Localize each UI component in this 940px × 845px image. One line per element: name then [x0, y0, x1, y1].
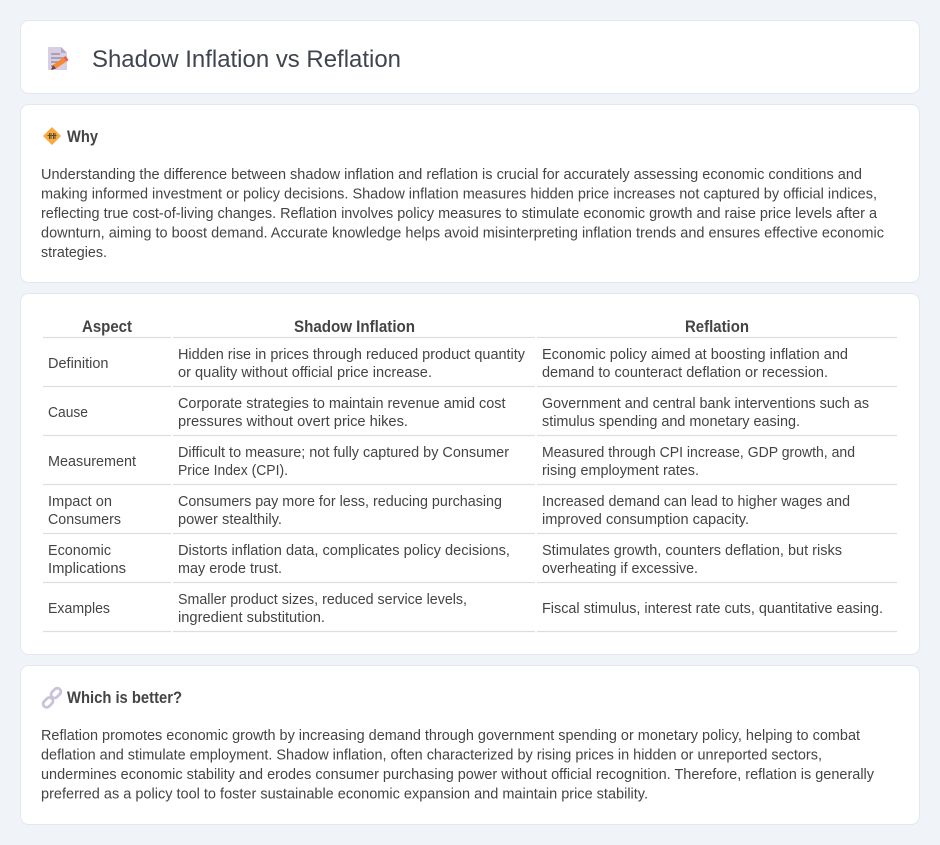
icon: memo with pencil	[48, 47, 68, 70]
text block: which is better paragraph: deflation and stimulate employment. Shadow inflation, often characterized by rising prices in hidden or unreported sectors,	[41, 746, 822, 764]
table row: examples: ingredient substitution.	[178, 610, 325, 626]
table row: economic implications: overheating if excessive.	[542, 561, 698, 577]
panel: header	[20, 20, 920, 94]
table row: economic implications: Distorts inflation data, complicates policy decisions,	[178, 543, 510, 559]
icon: warning diamond	[44, 128, 60, 144]
panel: comparison table	[20, 294, 920, 654]
table row: examples	[48, 592, 883, 626]
table row: impact on consumers: improved consumption capacity.	[542, 512, 749, 528]
table row: impact on consumers: Impact on	[48, 494, 112, 510]
text block: which is better paragraph: preferred as a policy tool to foster sustainable economic expansion and maintain price stability.	[41, 786, 648, 802]
table row: impact on consumers: Consumers pay more for less, reducing purchasing	[178, 494, 502, 510]
text block: which is better paragraph: undermines economic stability and erodes consumer purchasing power without official recognition. Therefore, reflation is generally	[41, 766, 874, 783]
table row: definition: Economic policy aimed at boosting inflation and	[542, 347, 848, 363]
table row: measurement: Measured through CPI increase, GDP growth, and	[542, 445, 855, 461]
table row: definition: demand to counteract deflation or recession.	[542, 365, 828, 381]
table row: measurement: rising employment rates.	[542, 463, 699, 479]
text block: why paragraph: strategies.	[41, 244, 107, 261]
table row: measurement: Price Index (CPI).	[178, 463, 288, 479]
table row: impact on consumers	[48, 494, 850, 528]
table row: definition: or quality without official price increase.	[178, 365, 432, 381]
icon: link	[42, 687, 62, 709]
table row: examples: Smaller product sizes, reduced service levels,	[178, 592, 467, 608]
text block: which is better paragraph: Reflation promotes economic growth by increasing demand through government spending or monetary policy, helping to combat	[41, 727, 861, 744]
table row: cause: stimulus spending and monetary easing.	[542, 414, 800, 430]
text block: which is better paragraph	[41, 727, 874, 802]
table row: economic implications	[48, 543, 842, 577]
table row: cause: Government and central bank interventions such as	[542, 396, 869, 412]
table row: measurement: Measurement	[48, 454, 136, 470]
table row: definition: Definition	[48, 356, 108, 372]
table row: economic implications: Stimulates growth, counters deflation, but risks	[542, 543, 842, 559]
text block: why paragraph: making informed investment or policy decisions. Shadow inflation measures hidden price increases not captured by official indices,	[41, 186, 877, 202]
text block: why paragraph: Understanding the difference between shadow inflation and reflation is crucial for accurately assessing economic conditions and	[41, 166, 862, 183]
table row: impact on consumers: Increased demand can lead to higher wages and	[542, 494, 850, 510]
title: Shadow Inflation vs Reflation	[92, 46, 401, 73]
table row: definition: Hidden rise in prices through reduced product quantity	[178, 347, 526, 363]
table header row: Reflation	[685, 318, 749, 336]
panel: which is better	[20, 666, 920, 824]
heading: which is better: Which is better?	[67, 689, 182, 707]
table row: economic implications: Implications	[48, 561, 126, 577]
table row: cause	[48, 396, 869, 430]
table row: impact on consumers: power stealthily.	[178, 512, 282, 528]
table row: measurement	[48, 445, 855, 479]
heading: why: Why	[67, 128, 99, 146]
table header row: Aspect	[82, 318, 132, 336]
table row: economic implications: may erode trust.	[178, 561, 282, 577]
table row: cause: Cause	[48, 405, 88, 421]
table row: economic implications: Economic	[48, 543, 111, 559]
table row: definition	[48, 347, 848, 381]
table row: impact on consumers: Consumers	[48, 512, 121, 528]
table row: measurement: Difficult to measure; not fully captured by Consumer	[178, 445, 509, 461]
table row: examples: Examples	[48, 601, 110, 617]
text block: why paragraph: reflecting true cost-of-living changes. Reflation involves policy measures to stimulate economic growth and raise price levels after a	[41, 205, 878, 222]
text block: why paragraph: downturn, aiming to boost demand. Accurate knowledge helps avoid misinterpreting inflation trends and ensures effective economic	[41, 224, 884, 242]
text block: why paragraph	[41, 166, 884, 261]
table header row	[82, 318, 749, 336]
table header row: Shadow Inflation	[294, 318, 415, 336]
table row: cause: pressures without overt price hikes.	[178, 414, 408, 430]
panel: why	[20, 104, 920, 282]
table row: cause: Corporate strategies to maintain revenue amid cost	[178, 396, 506, 412]
table row: examples: Fiscal stimulus, interest rate cuts, quantitative easing.	[542, 601, 883, 617]
